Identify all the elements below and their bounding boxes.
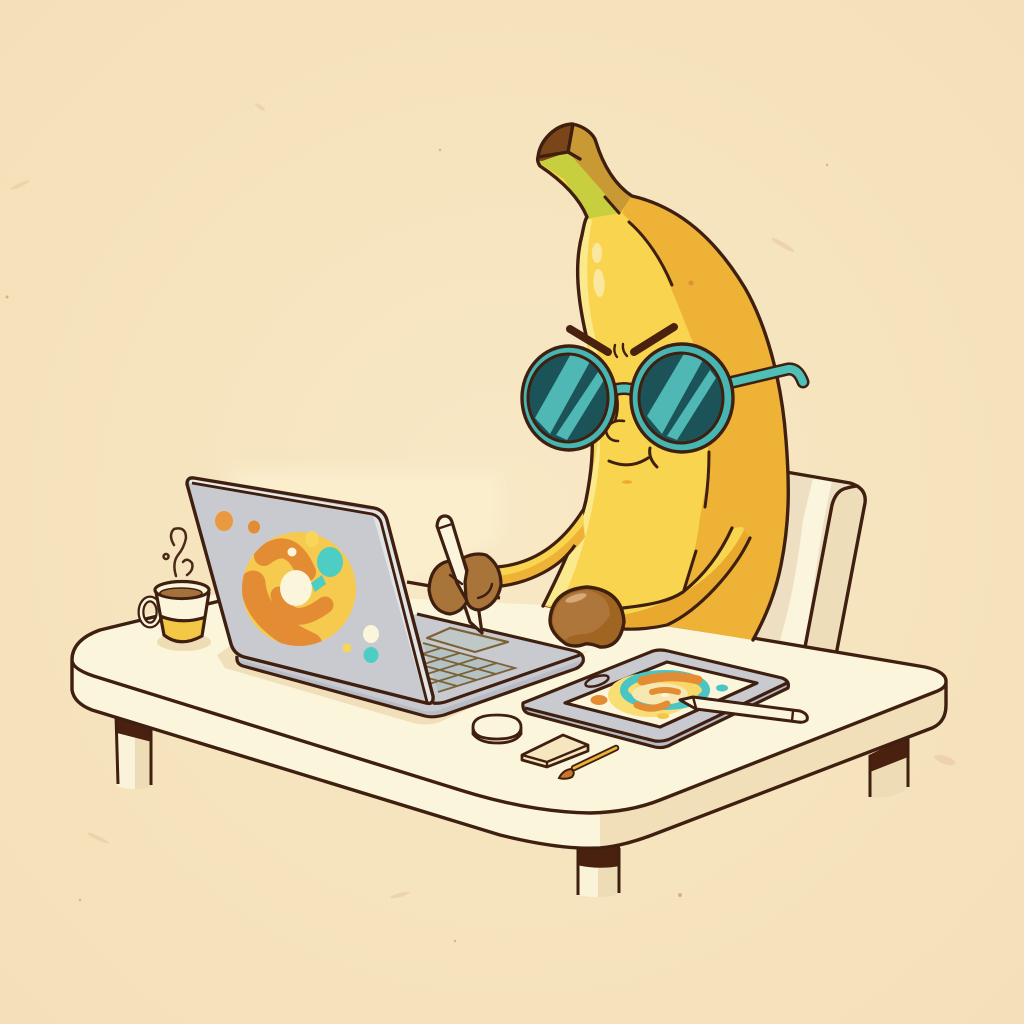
banana far arm — [497, 510, 585, 586]
stem green — [540, 154, 618, 219]
lid artwork — [215, 511, 379, 663]
cup shadow — [157, 633, 211, 651]
left leg — [114, 712, 152, 789]
mouth — [609, 448, 657, 467]
stem cut — [539, 126, 571, 161]
keyboard — [422, 643, 515, 692]
tablet screen — [565, 662, 757, 727]
laptop lid — [187, 478, 433, 703]
banana shine — [592, 243, 605, 297]
chair — [750, 468, 866, 655]
eyebrows — [570, 327, 674, 352]
banana light side — [540, 156, 752, 640]
nose — [606, 396, 624, 441]
trackpad — [427, 628, 508, 652]
right leg — [869, 736, 908, 798]
temple arm — [733, 369, 803, 382]
banana dark side — [622, 197, 786, 640]
desk — [72, 582, 946, 848]
tablet stylus — [680, 697, 807, 722]
near hand — [550, 587, 624, 647]
desk legs — [114, 712, 908, 897]
desk side face — [72, 660, 946, 848]
right finger ball — [463, 554, 501, 610]
cup body — [156, 592, 209, 642]
steam — [164, 528, 192, 576]
tablet button — [584, 673, 610, 689]
stylus — [437, 516, 482, 633]
right lens — [631, 344, 733, 452]
left lens — [522, 346, 616, 450]
banana rim highlight — [545, 218, 600, 605]
round eraser puck — [473, 715, 521, 743]
front leg — [577, 846, 620, 897]
banana near arm — [622, 527, 750, 630]
sunglasses — [522, 344, 803, 452]
stylus in hand — [429, 516, 501, 633]
desk top — [72, 590, 946, 813]
laptop shadow — [217, 645, 590, 724]
cup handle — [141, 599, 159, 625]
coffee cup — [141, 528, 211, 651]
paintbrush — [559, 748, 616, 779]
bridge — [612, 388, 636, 391]
laptop base — [237, 614, 583, 717]
banana — [536, 122, 790, 642]
tablet artwork — [590, 671, 728, 719]
left finger ball — [429, 561, 467, 614]
drawing tablet — [523, 650, 807, 748]
face — [570, 327, 674, 467]
eraser block — [522, 735, 588, 767]
laptop — [187, 478, 590, 724]
stem brown — [568, 122, 632, 214]
illustration: banana in sunglasses working at a desk — [6, 103, 956, 942]
